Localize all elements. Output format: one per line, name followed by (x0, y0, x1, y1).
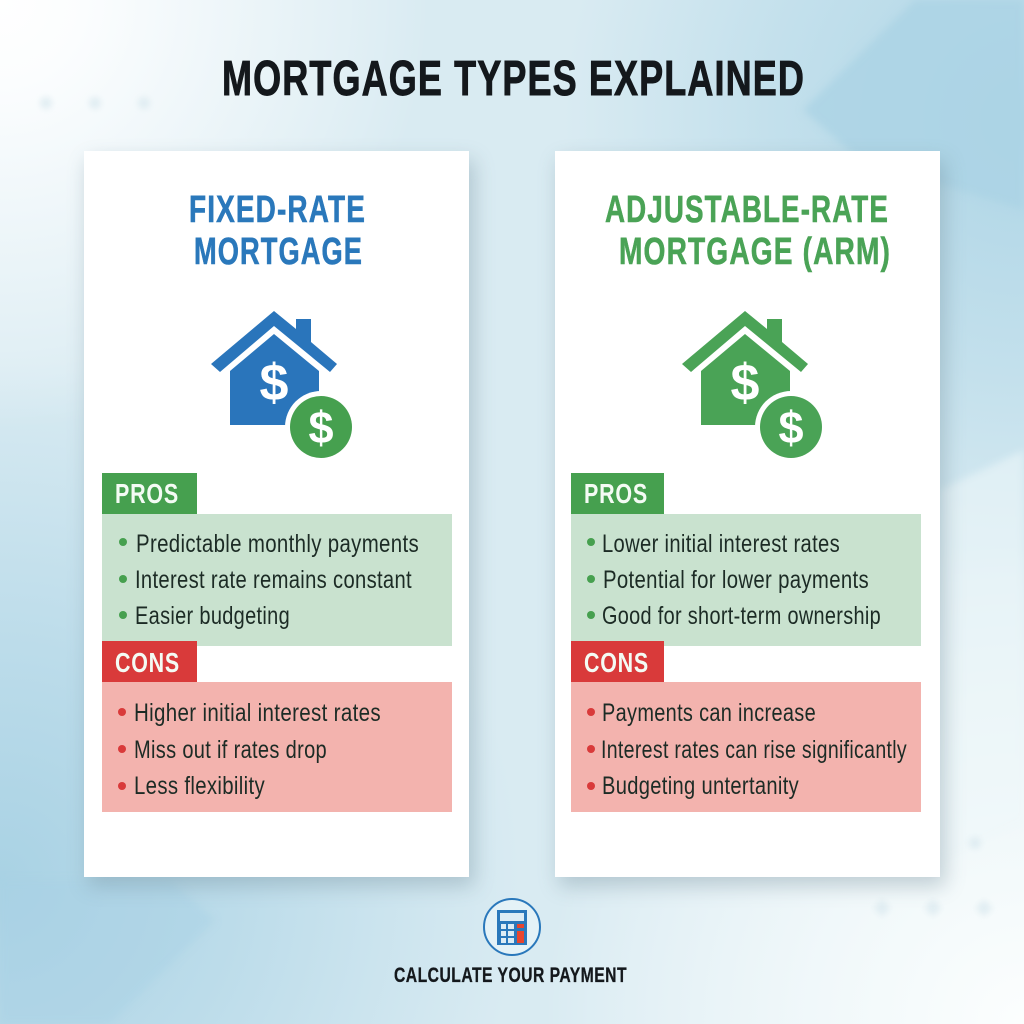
heading: adjustable-rate mortgage (605, 189, 891, 273)
icon: house with dollar (211, 311, 357, 463)
pros block: Lower initial interest rates (602, 530, 840, 558)
icon: calculator (484, 899, 540, 955)
pros block: Easier budgeting (135, 602, 290, 630)
cons block (102, 641, 452, 812)
cons block: Higher initial interest rates (134, 699, 381, 727)
pros block: PROS (115, 478, 179, 509)
cons block: Miss out if rates drop (134, 736, 327, 764)
title: MORTGAGE TYPES EXPLAINED (222, 52, 805, 106)
pros block: PROS (584, 478, 648, 509)
cons block: Payments can increase (602, 699, 816, 727)
cons block: CONS (115, 647, 180, 678)
heading: adjustable-rate mortgage: ADJUSTABLE-RATE (605, 189, 889, 231)
heading: adjustable-rate mortgage: MORTGAGE (ARM) (619, 231, 891, 273)
heading: fixed-rate mortgage: FIXED-RATE (189, 189, 366, 231)
icon: green house with dollar (682, 311, 827, 463)
icon: green house with dollar: $ (731, 354, 760, 412)
cons block: Budgeting untertanity (602, 772, 799, 800)
cons block: Less flexibility (134, 772, 265, 800)
panel: adjustable-rate mortgage (555, 151, 945, 886)
pros block: Interest rate remains constant (135, 566, 412, 594)
call to action: CALCULATE YOUR PAYMENT (394, 964, 627, 987)
icon: house with dollar: $ (308, 402, 334, 453)
panel: fixed-rate mortgage (84, 151, 474, 886)
cons block (571, 641, 921, 812)
icon: house with dollar: $ (260, 354, 289, 412)
icon: green house with dollar: $ (778, 402, 804, 453)
cons block: CONS (584, 647, 649, 678)
cons block: Interest rates can rise significantly (601, 736, 907, 764)
pros block (571, 473, 921, 646)
pros block: Good for short-term ownership (602, 602, 881, 630)
heading: fixed-rate mortgage (189, 189, 366, 273)
pros block: Predictable monthly payments (136, 530, 419, 558)
pros block: Potential for lower payments (603, 566, 869, 594)
heading: fixed-rate mortgage: MORTGAGE (194, 231, 363, 273)
pros block (102, 473, 452, 646)
